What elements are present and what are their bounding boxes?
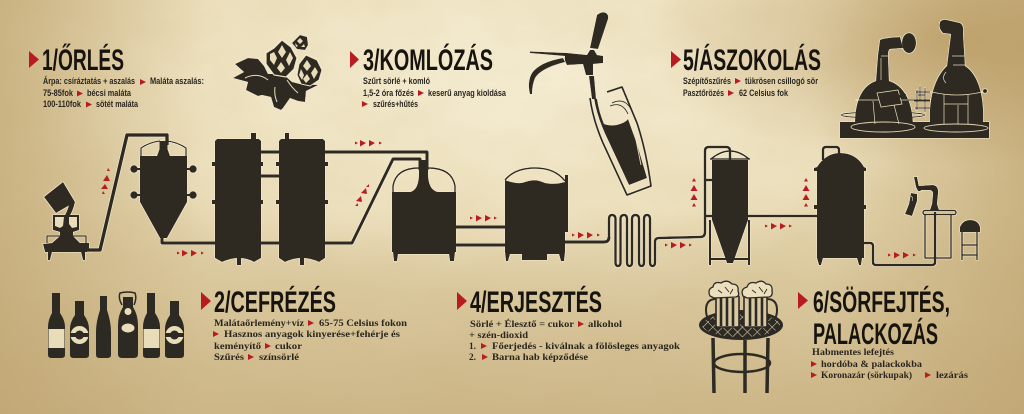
- text block 2: [213, 318, 408, 363]
- connecting pipes: [908, 86, 930, 112]
- beer fill: [594, 98, 647, 185]
- pipes: [86, 135, 935, 266]
- text block 1: Árpa: csíráztatás + aszalás: [43, 76, 135, 86]
- heading: 1/ŐRLÉS: 1/ŐRLÉS: [42, 43, 124, 77]
- text block 5: 62 Celsius fok: [739, 88, 788, 98]
- text block 4: Sörlé + Élesztő = cukor: [470, 318, 575, 330]
- hop leaf: [233, 58, 318, 110]
- text block 4: 1.: [469, 341, 476, 352]
- text block 5: [683, 76, 818, 98]
- text block 6: Habmentes lefejtés: [812, 347, 894, 358]
- text block 5: tükrösen csillogó sör: [745, 76, 818, 86]
- heading marker 3: [350, 51, 359, 68]
- section 3: komlózás: [350, 43, 506, 109]
- text block 4: + szén-dioxid: [469, 330, 529, 341]
- arrows: up fermenter pipe: [690, 178, 698, 206]
- section 2: cefrézés: [201, 285, 408, 363]
- icon: bar counter and tap: [905, 177, 956, 258]
- still base: [840, 122, 989, 138]
- heading marker 4: [457, 292, 467, 310]
- right mug: [742, 281, 777, 327]
- text block 6: hordóba & palackokba: [821, 359, 922, 370]
- text block 4: [469, 318, 681, 363]
- icon: whirlpool tank: [505, 168, 568, 261]
- small hop cone: [292, 35, 308, 50]
- heading: 6/SÖRFEJTÉS,: 6/SÖRFEJTÉS,: [813, 285, 950, 319]
- right still: [924, 20, 988, 132]
- glass outline: [590, 87, 651, 195]
- text block 4: Főerjedés - kiválnak a fölösleges anyagok: [492, 341, 681, 352]
- text block 1: 100-110fok: [43, 99, 81, 109]
- bottle 1: [48, 293, 65, 358]
- text block 1: Maláta aszalás:: [150, 76, 204, 86]
- foam arcs and highlight: [610, 101, 641, 165]
- arrows: cooler to fermenter: [665, 242, 692, 248]
- text block 6: lezárás: [936, 370, 968, 381]
- section 5: ászokolás: [671, 43, 821, 98]
- text block 1: [43, 76, 204, 109]
- section 6: sörfejtés, palackozás: [798, 285, 968, 381]
- text block 4: Barna hab képződése: [492, 352, 589, 363]
- text block 6: Koronazár (sörkupak): [821, 370, 912, 381]
- arrows: kettle to whirlpool: [470, 215, 497, 222]
- icon: beer tap pouring into glass: [529, 12, 651, 195]
- section 1: őrlés: [29, 43, 204, 109]
- icon: bar stool: [960, 220, 980, 260]
- arrows: mash to lauter: [177, 250, 204, 256]
- text block 3: [362, 76, 506, 109]
- icon: bottles: [48, 292, 184, 358]
- text block 1: bécsi maláta: [87, 88, 131, 98]
- text block 2: 65-75 Celsius fokon: [319, 318, 408, 329]
- bottle 6: [165, 301, 184, 358]
- heading: PALACKOZÁS: PALACKOZÁS: [813, 317, 938, 351]
- heading: 5/ÁSZOKOLÁS: 5/ÁSZOKOLÁS: [683, 43, 821, 77]
- arrows: up tank side: [802, 178, 810, 206]
- arrows: return to kettle: [355, 184, 369, 206]
- right hop cone: [297, 55, 322, 86]
- text block 1: sötét maláta: [96, 99, 138, 109]
- flow arrows: [101, 140, 916, 258]
- left mug: [706, 281, 739, 327]
- beer stream: [589, 76, 596, 99]
- text block 3: 1,5-2 óra főzés: [363, 88, 414, 98]
- icon: conditioning tank: [814, 153, 866, 265]
- text block 4: alkohol: [588, 319, 622, 330]
- bottle 3: [96, 296, 111, 358]
- text block 6: [811, 347, 968, 381]
- text block 1: 75-85fok: [43, 88, 73, 98]
- heading: 2/CEFRÉZÉS: 2/CEFRÉZÉS: [214, 285, 336, 319]
- text block 2: Malátaőrlemény+víz: [214, 318, 305, 329]
- table legs: [713, 338, 768, 393]
- heading marker 1: [29, 51, 39, 68]
- icon: lauter tank B: [276, 133, 328, 265]
- heading marker 2: [201, 292, 211, 310]
- text block 2: keményítő: [214, 341, 261, 352]
- tap handle: [590, 12, 608, 49]
- icon: brew kettle: [392, 160, 456, 261]
- arrows: whirlpool to cooler: [572, 232, 600, 238]
- bottle 2: [70, 301, 89, 358]
- arrows: lauter to kettle: [355, 140, 382, 146]
- text block 2: Szűrés: [214, 352, 244, 363]
- text block 2: cukor: [275, 341, 303, 352]
- process line: equipment and pipes: [43, 133, 980, 266]
- tap spout curve: [529, 58, 565, 94]
- table ring: [714, 354, 770, 372]
- text block 2: színsörlé: [259, 352, 300, 363]
- icon: grinder: [43, 182, 89, 260]
- table top: [699, 310, 783, 340]
- arrows: grinder to mash: [101, 168, 110, 194]
- icon: fermenter: [710, 151, 750, 265]
- text block 5: Szépítőszűrés: [683, 76, 731, 86]
- heading: 4/ERJESZTÉS: 4/ERJESZTÉS: [470, 285, 602, 319]
- tap body: [530, 50, 603, 75]
- text block 4: 2.: [469, 352, 476, 363]
- heading: 3/KOMLÓZÁS: 3/KOMLÓZÁS: [363, 43, 493, 77]
- section 4: erjesztés: [457, 285, 681, 363]
- arrows: fermenter to tank: [765, 223, 792, 230]
- text block 3: keserű anyag kioldása: [428, 88, 506, 98]
- icon: copper stills: [840, 20, 989, 138]
- text block 3: szűrés+hűtés: [373, 99, 418, 109]
- left still: [841, 33, 925, 132]
- text block 2: Hasznos anyagok kinyerése+fehérje és: [224, 329, 400, 340]
- text block 5: Pasztőrözés: [683, 88, 724, 98]
- bottle 5: [143, 293, 160, 358]
- big hop cone: [266, 40, 297, 77]
- icon: lauter tank A: [212, 133, 263, 265]
- bottle 4 swing-top: [118, 292, 138, 358]
- text block 3: Szűrt sörlé + komló: [363, 76, 431, 86]
- icon: table with beer mugs: [699, 281, 783, 393]
- icon: hops: [233, 35, 322, 110]
- heading marker 5: [671, 51, 681, 68]
- arrows: tank to tap: [888, 252, 916, 258]
- heading marker 6: [798, 292, 808, 309]
- icon: mash tun: [130, 141, 197, 238]
